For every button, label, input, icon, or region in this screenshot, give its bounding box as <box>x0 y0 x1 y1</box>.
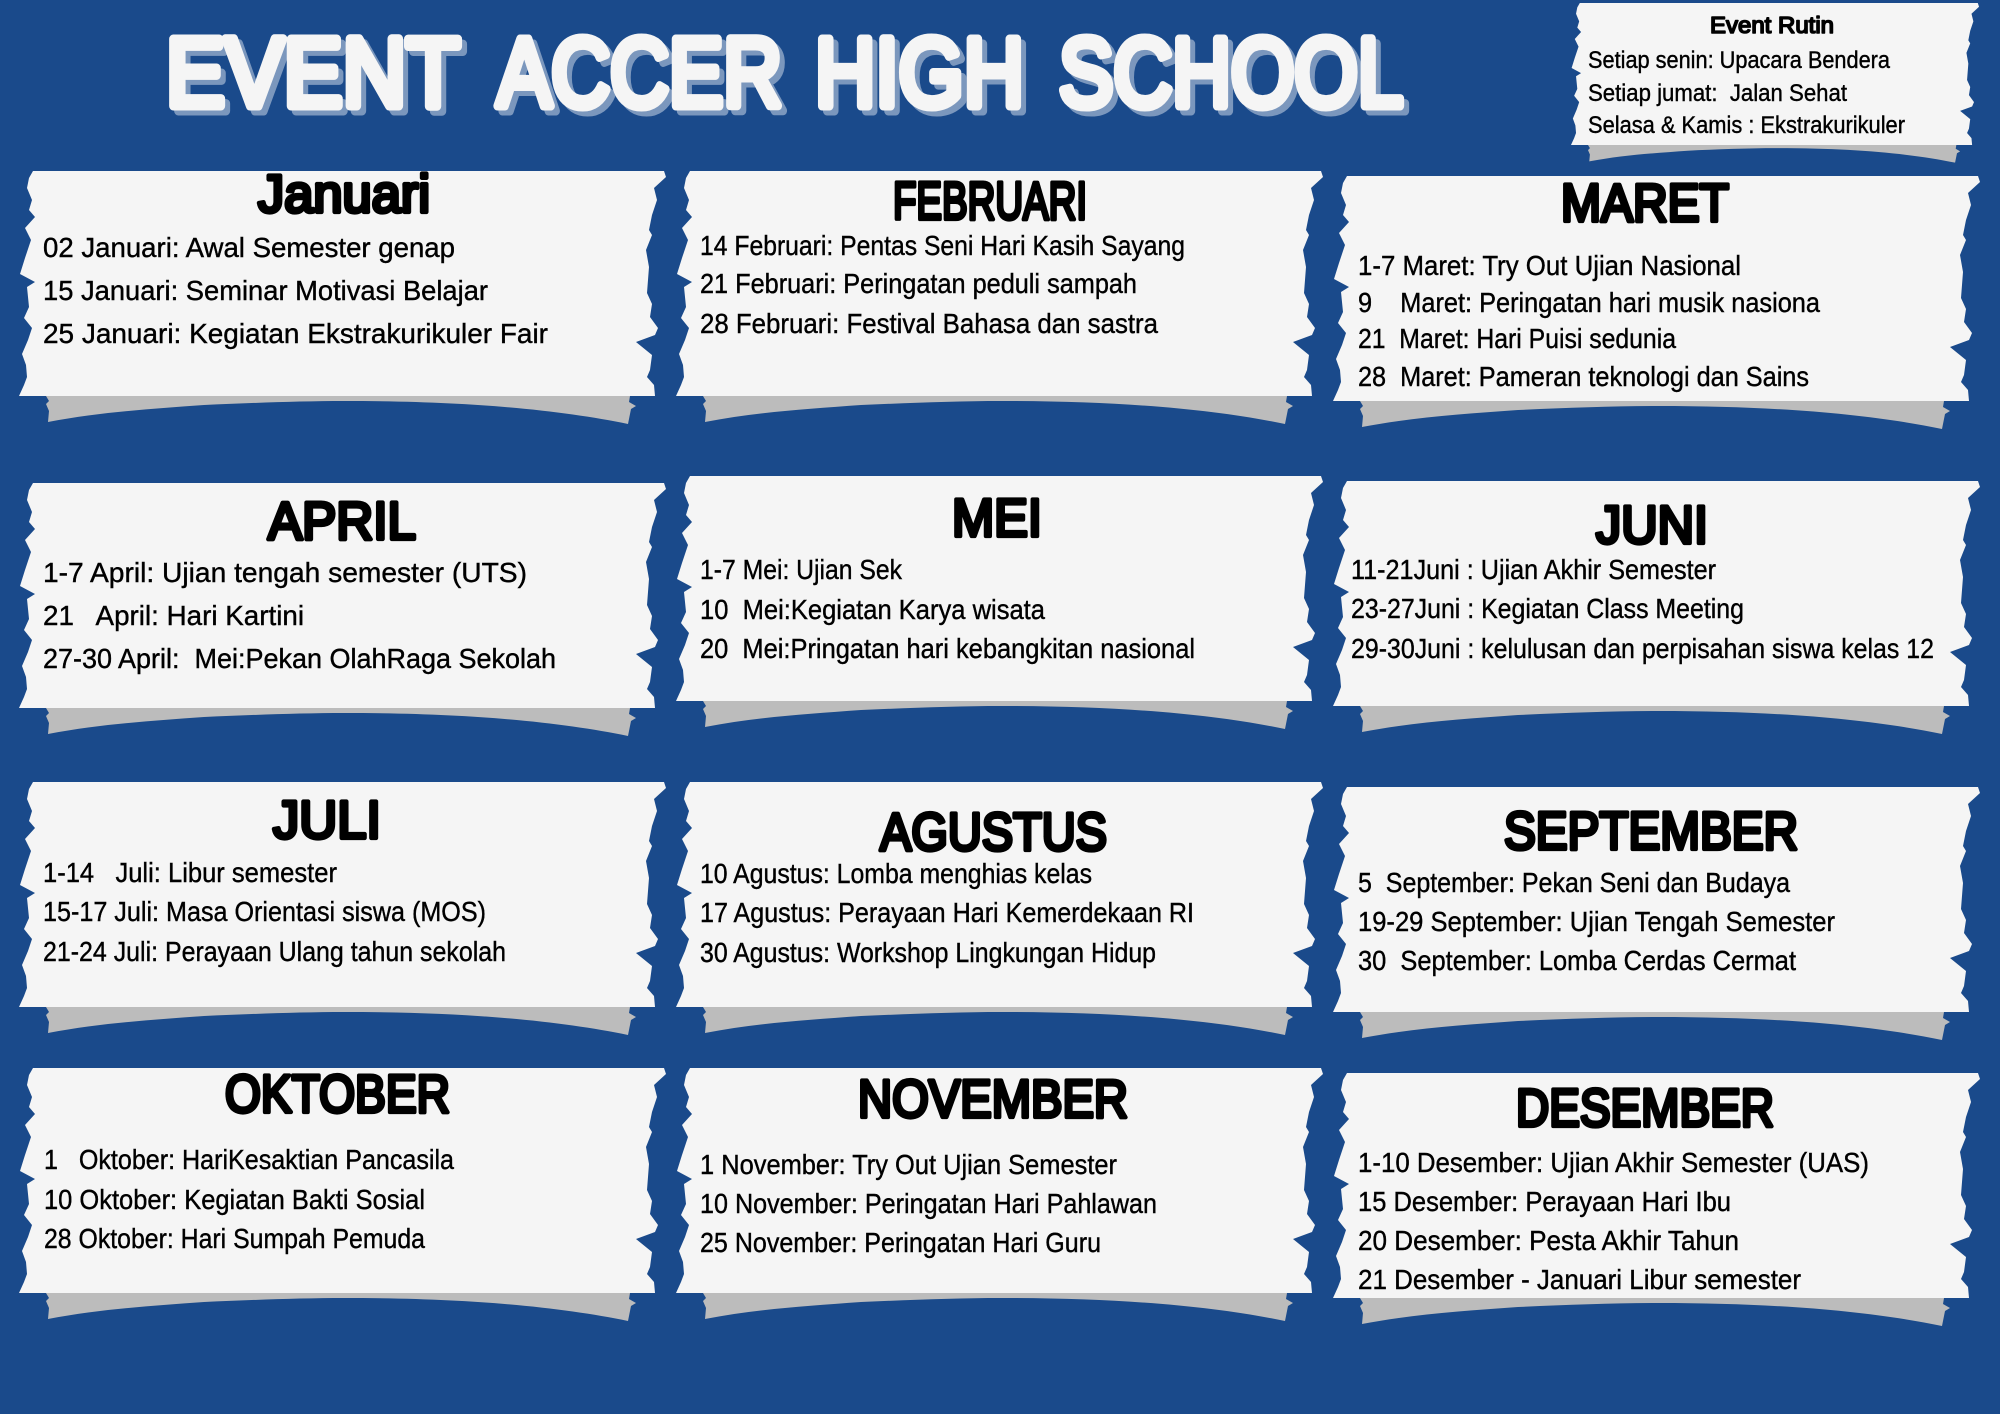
text: april events: 21 April: Hari Kartini <box>43 600 304 631</box>
text: maret events: 9 Maret: Peringatan hari musik nasiona <box>1358 287 1820 318</box>
heading: agustus: AGUSTUS <box>880 803 1107 862</box>
title: EVENT <box>171 23 465 132</box>
text: november events: 25 November: Peringatan Hari Guru <box>700 1227 1101 1258</box>
heading: desember: DESEMBER <box>1516 1079 1774 1138</box>
text: februari events: 28 Februari: Festival Bahasa dan sastra <box>700 308 1158 339</box>
text: oktober events <box>44 1144 454 1254</box>
panel: maret <box>1333 174 1980 429</box>
text: juni events: 11-21Juni : Ujian Akhir Semester <box>1351 554 1716 585</box>
text: januari events: 25 Januari: Kegiatan Ekstrakurikuler Fair <box>43 318 548 349</box>
text: mei events: 10 Mei:Kegiatan Karya wisata <box>700 594 1045 625</box>
text: routine events: Setiap jumat: Jalan Sehat <box>1588 80 1847 107</box>
heading: oktober: OKTOBER <box>225 1065 450 1124</box>
text: juli events <box>43 857 506 967</box>
panel: juni <box>1333 481 1980 734</box>
text: juni events <box>1351 554 1934 664</box>
text: januari events <box>43 232 548 349</box>
text: routine events <box>1588 47 1905 139</box>
panel: november <box>676 1068 1323 1321</box>
text: agustus events: 30 Agustus: Workshop Lingkungan Hidup <box>700 937 1156 968</box>
text: april events: 1-7 April: Ujian tengah semester (UTS) <box>43 557 527 588</box>
title: EVENT <box>166 18 460 127</box>
panel: april <box>19 483 666 736</box>
text: desember events <box>1358 1147 1869 1295</box>
text: juni events: 23-27Juni : Kegiatan Class Meeting <box>1351 593 1744 624</box>
text: agustus events <box>700 858 1194 968</box>
text: oktober events: 10 Oktober: Kegiatan Bakti Sosial <box>44 1184 425 1215</box>
heading: april: APRIL <box>268 492 416 551</box>
text: april events: 27-30 April: Mei:Pekan OlahRaga Sekolah <box>43 643 556 674</box>
heading: event rutin: Event Rutin <box>1710 12 1834 38</box>
text: maret events: 28 Maret: Pameran teknologi dan Sains <box>1358 361 1809 392</box>
text: april events <box>43 557 556 674</box>
panel: februari <box>676 171 1323 424</box>
text: agustus events: 17 Agustus: Perayaan Hari Kemerdekaan RI <box>700 897 1194 928</box>
heading: maret: MARET <box>1561 174 1729 233</box>
text: september events <box>1358 867 1835 976</box>
text: januari events: 15 Januari: Seminar Motivasi Belajar <box>43 275 488 306</box>
text: routine events: Setiap senin: Upacara Bendera <box>1588 47 1891 74</box>
panel: event rutin <box>1571 3 1979 163</box>
text: maret events <box>1358 250 1820 392</box>
text: desember events: 20 Desember: Pesta Akhir Tahun <box>1358 1225 1739 1256</box>
text: mei events: 20 Mei:Pringatan hari kebangkitan nasional <box>700 633 1195 664</box>
text: mei events <box>700 554 1195 664</box>
text: september events: 30 September: Lomba Cerdas Cermat <box>1358 945 1796 976</box>
text: februari events: 21 Februari: Peringatan peduli sampah <box>700 268 1137 299</box>
text: oktober events: 28 Oktober: Hari Sumpah Pemuda <box>44 1223 425 1254</box>
panel: mei <box>676 476 1323 729</box>
title: HIGH <box>815 18 1024 127</box>
heading: juni: JUNI <box>1596 496 1708 555</box>
text: januari events: 02 Januari: Awal Semester genap <box>43 232 455 263</box>
text: maret events: 21 Maret: Hari Puisi sedunia <box>1358 323 1676 354</box>
text: juli events: 1-14 Juli: Libur semester <box>43 857 337 888</box>
text: november events: 1 November: Try Out Ujian Semester <box>700 1149 1117 1180</box>
title: ACCER <box>502 23 787 132</box>
text: desember events: 1-10 Desember: Ujian Akhir Semester (UAS) <box>1358 1147 1869 1178</box>
text: september events: 19-29 September: Ujian Tengah Semester <box>1358 906 1835 937</box>
panel: oktober <box>19 1065 666 1321</box>
text: desember events: 15 Desember: Perayaan Hari Ibu <box>1358 1186 1731 1217</box>
panel: juli <box>19 782 666 1035</box>
title <box>166 18 1408 132</box>
text: september events: 5 September: Pekan Seni dan Budaya <box>1358 867 1790 898</box>
text: mei events: 1-7 Mei: Ujian Sek <box>700 554 903 585</box>
title: HIGH <box>820 23 1029 132</box>
heading: november: NOVEMBER <box>858 1070 1128 1129</box>
text: routine events: Selasa & Kamis : Ekstrakurikuler <box>1588 112 1905 139</box>
heading: juli: JULI <box>273 791 381 850</box>
panel: september <box>1333 787 1980 1040</box>
text: juli events: 15-17 Juli: Masa Orientasi siswa (MOS) <box>43 896 486 927</box>
title: ACCER <box>497 18 782 127</box>
heading: januari: Januari <box>258 165 430 224</box>
panel: januari <box>19 165 666 424</box>
panel: desember <box>1333 1073 1980 1326</box>
title: SCHOOL <box>1064 23 1408 132</box>
heading: mei: MEI <box>952 489 1042 548</box>
title: SCHOOL <box>1059 18 1403 127</box>
text: februari events: 14 Februari: Pentas Seni Hari Kasih Sayang <box>700 230 1185 261</box>
text: november events <box>700 1149 1157 1258</box>
text: november events: 10 November: Peringatan Hari Pahlawan <box>700 1188 1157 1219</box>
panel: agustus <box>676 782 1323 1035</box>
text: oktober events: 1 Oktober: HariKesaktian Pancasila <box>44 1144 454 1175</box>
heading: september: SEPTEMBER <box>1504 802 1798 861</box>
text: agustus events: 10 Agustus: Lomba menghias kelas <box>700 858 1092 889</box>
text: maret events: 1-7 Maret: Try Out Ujian Nasional <box>1358 250 1741 281</box>
text: februari events <box>700 230 1185 339</box>
heading: februari: FEBRUARI <box>893 172 1087 231</box>
text: desember events: 21 Desember - Januari Libur semester <box>1358 1264 1801 1295</box>
text: juli events: 21-24 Juli: Perayaan Ulang tahun sekolah <box>43 936 506 967</box>
text: juni events: 29-30Juni : kelulusan dan perpisahan siswa kelas 12 <box>1351 633 1934 664</box>
